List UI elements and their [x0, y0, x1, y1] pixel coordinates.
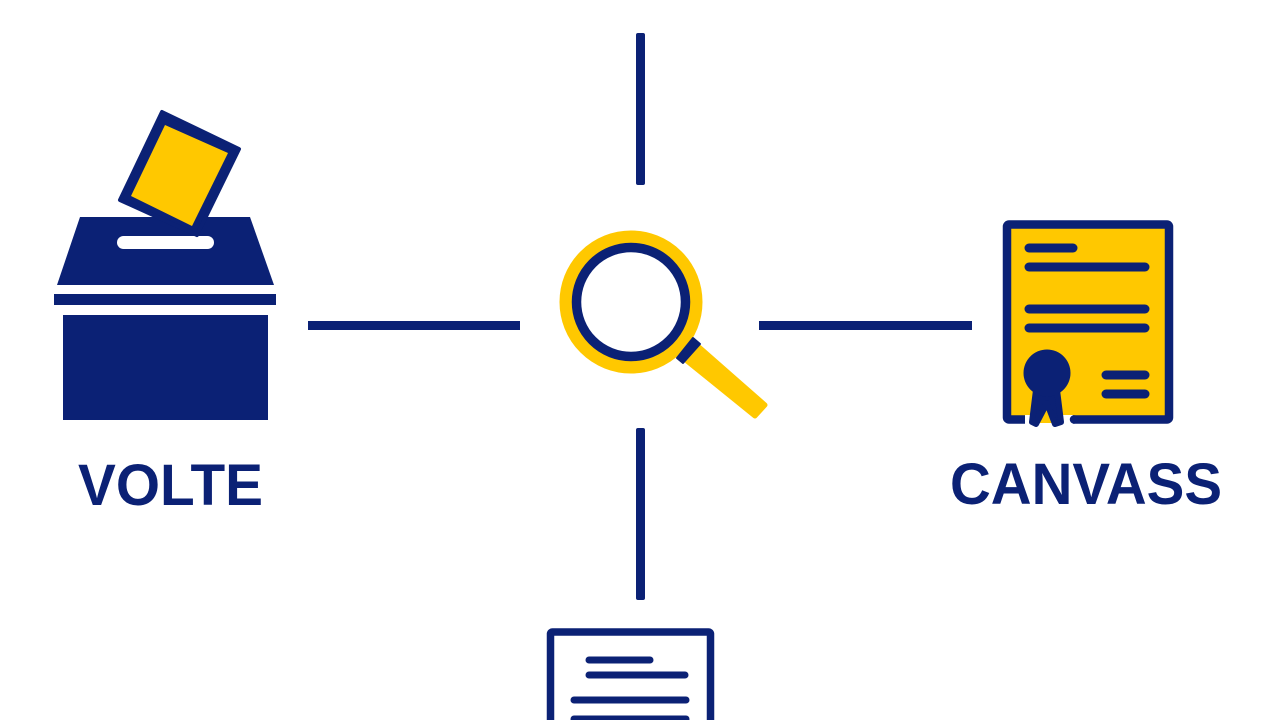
- bottom edge gap: [1025, 415, 1073, 425]
- connector: left: [308, 321, 520, 330]
- certificate sheet: [1007, 224, 1169, 420]
- icon: ballot box: [54, 112, 276, 420]
- label: CANVASS: CANVASS: [950, 452, 1222, 517]
- icon: magnifying glass: [566, 237, 765, 416]
- box band: [54, 294, 276, 305]
- ballot paper outline: [120, 112, 239, 235]
- icon: document: [550, 632, 710, 720]
- yellow between ribbons: [1032, 414, 1062, 423]
- connector: bottom: [636, 428, 645, 600]
- ballot paper fill: [131, 125, 228, 226]
- connector: right: [759, 321, 972, 330]
- text lines: [1029, 248, 1145, 394]
- connector: top: [636, 33, 645, 185]
- document sheet: [550, 632, 710, 720]
- seal ribbons: [1032, 390, 1061, 424]
- bottom edge rounded end: [1070, 415, 1078, 424]
- icon: certificate: [1007, 224, 1169, 425]
- document lines: [574, 660, 686, 719]
- label: VOLTE: VOLTE: [78, 453, 263, 518]
- navy lens ring: [576, 248, 686, 356]
- outer yellow rim: [566, 237, 696, 367]
- lid slot: [117, 236, 214, 249]
- box body: [63, 315, 268, 420]
- box lid: [57, 217, 274, 285]
- handle collar: [677, 338, 700, 363]
- handle: [687, 347, 765, 416]
- seal: [1024, 350, 1070, 396]
